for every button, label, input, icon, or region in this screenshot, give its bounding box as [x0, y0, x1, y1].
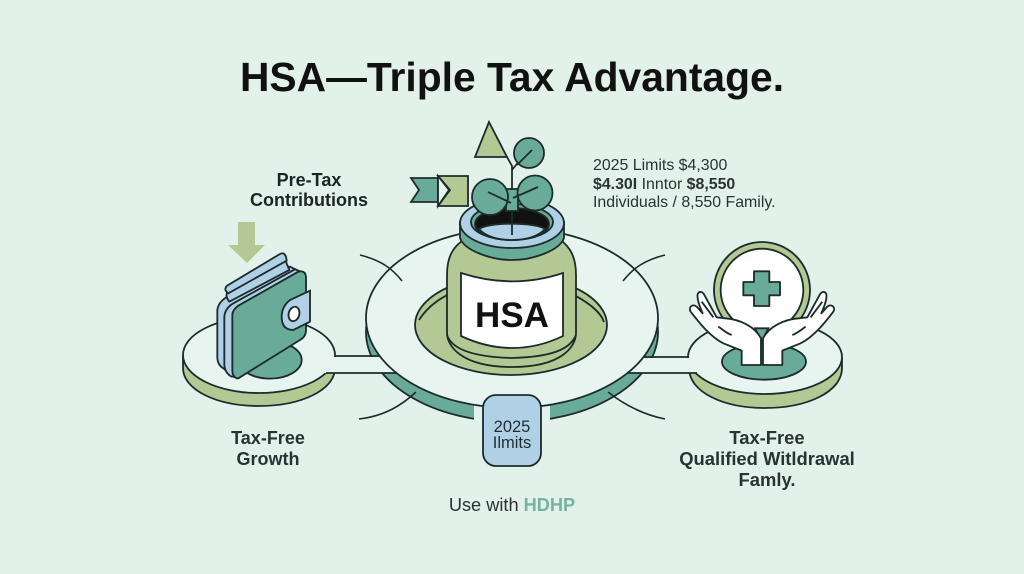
icon: flags: [411, 176, 468, 206]
icon: plant: [472, 122, 552, 235]
text: limits: Individuals / 8,550 Family.: [593, 194, 776, 211]
central platform base band: [366, 242, 658, 435]
jar base ellipse: [415, 275, 607, 375]
connector: right bar: [620, 357, 700, 373]
badge: 2025 limits: Ilmits: [493, 434, 531, 452]
panel: left disc: [183, 317, 335, 406]
label: Tax-Free Qualified Withdrawal: Famly.: [739, 469, 795, 490]
icon: wallet: [217, 253, 310, 379]
decorative arcs: [359, 255, 665, 419]
label: Tax-Free Qualified Withdrawal: Tax-Free: [729, 427, 805, 448]
title: HSA—Triple Tax Advantage.: [240, 54, 784, 100]
label: HSA: [461, 273, 563, 348]
label: Tax-Free Growth: Growth: [236, 449, 300, 469]
heading: Pre-Tax Contributions: Pre-Tax: [277, 170, 341, 190]
icon: healthcare hands: [690, 242, 834, 380]
connector: left bar: [322, 356, 402, 373]
jar label text: HSA: [475, 296, 549, 335]
text: limits: 2025 Limits $4,300: [593, 157, 727, 174]
text: limits: $4.30I Inntor $8,550: [593, 176, 735, 193]
icon: HSA jar: [447, 198, 576, 367]
badge: 2025 limits: 2025: [494, 418, 530, 436]
footer: Use with HDHP: Use with HDHP: [449, 495, 575, 515]
badge: 2025 limits: [483, 395, 541, 466]
label: Tax-Free Growth: Tax-Free: [231, 428, 305, 448]
label: Tax-Free Qualified Withdrawal: Qualified Witldrawal: [679, 448, 855, 469]
panel: right disc: [688, 320, 842, 408]
icon: down arrow: [228, 222, 265, 263]
heading: Pre-Tax Contributions: Contributions: [250, 190, 368, 210]
panel: central platform: [366, 228, 658, 408]
